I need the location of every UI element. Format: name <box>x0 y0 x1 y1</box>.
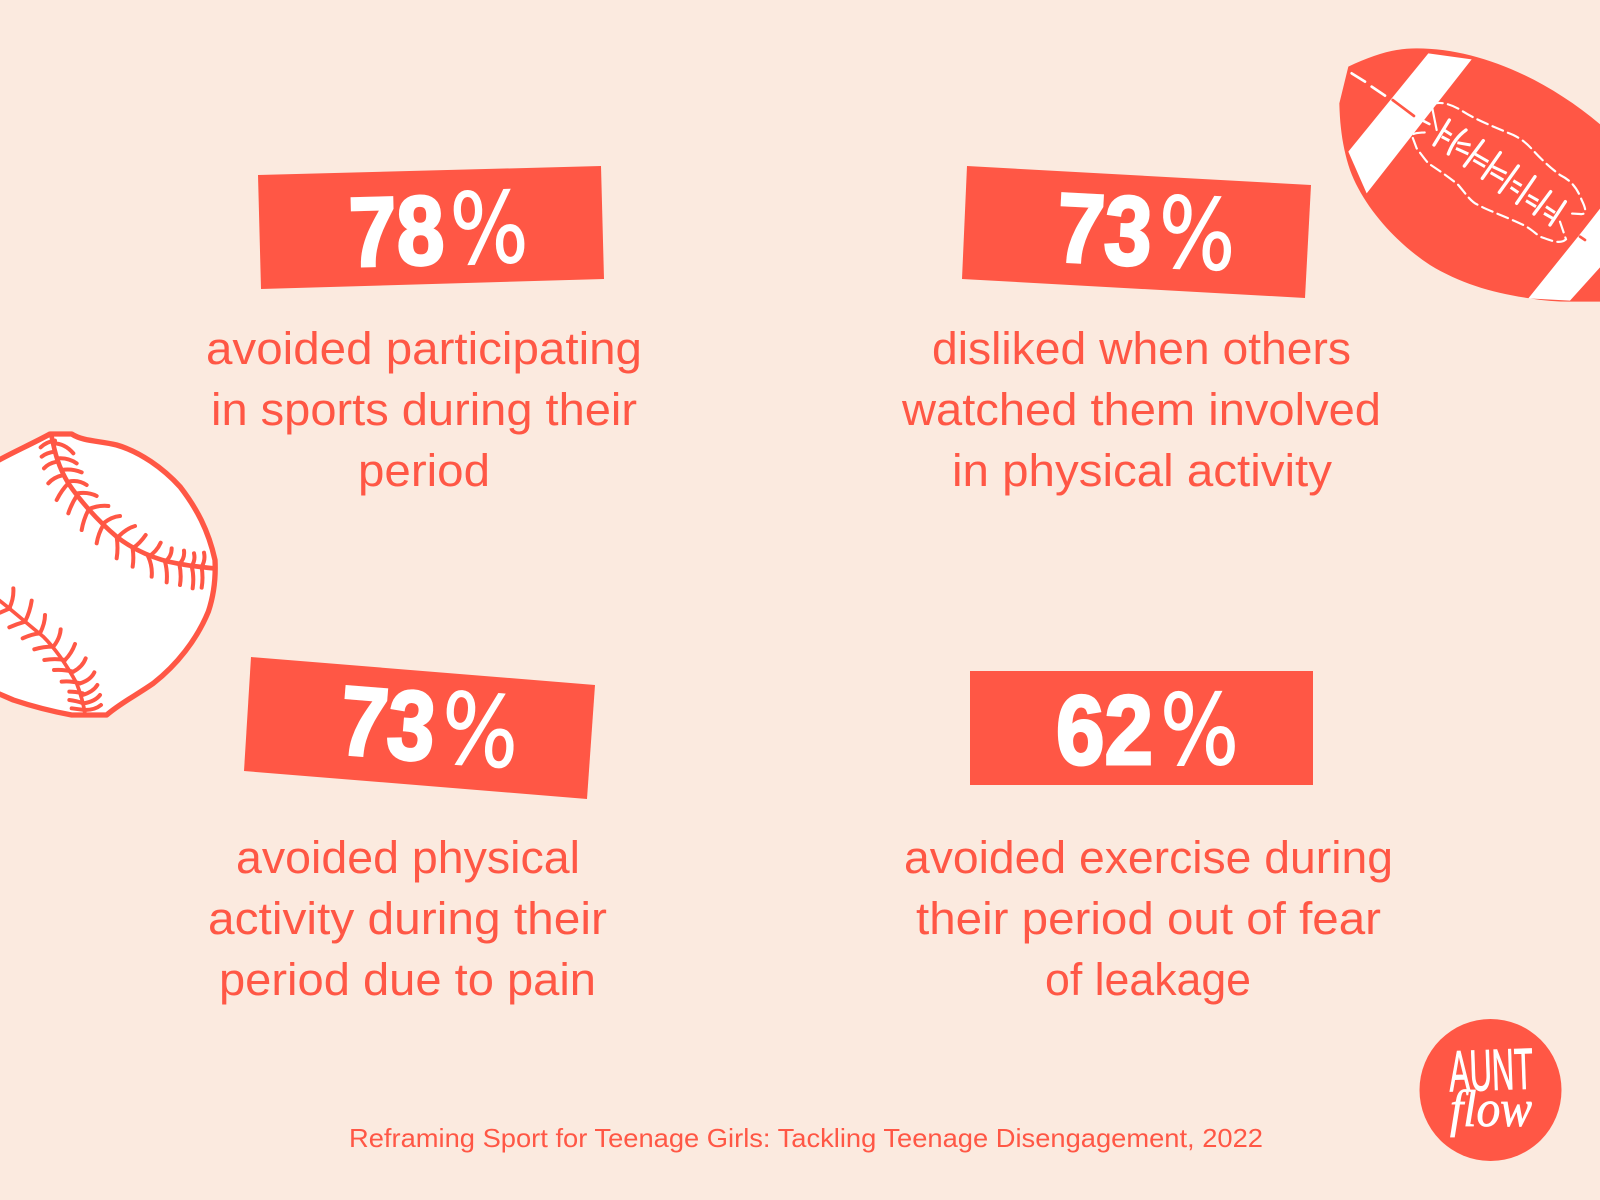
icon: baseball <box>0 434 215 715</box>
text: stat 73% bottom left description: activity during their <box>208 893 607 944</box>
stat badge: 73% bottom left: % <box>436 672 523 792</box>
icon: american football <box>1339 48 1600 302</box>
text: stat 62% description: of leakage <box>1045 954 1251 1005</box>
text: stat 73% bottom left description: period due to pain <box>219 954 596 1005</box>
logo: Aunt Flow: flow <box>1450 1081 1532 1138</box>
stat badge: 73% bottom left: 73 <box>336 665 440 782</box>
stat badge: 62%: 62 <box>1056 675 1153 785</box>
text: stat 73% top right description: disliked when others <box>932 323 1351 374</box>
text: stat 78% description: period <box>358 445 490 496</box>
stat badge: 62% <box>970 671 1313 788</box>
text: stat 62% description: their period out of fear <box>916 893 1381 944</box>
logo: Aunt Flow <box>1420 1019 1562 1161</box>
stat badge: 78%: 78 <box>348 175 446 287</box>
stat badge: 78% <box>258 166 604 290</box>
text: stat 73% bottom left description: avoided physical <box>236 832 580 883</box>
text: stat 73% top right description: watched them involved <box>901 384 1381 435</box>
text: stat 62% description: avoided exercise during <box>904 832 1393 883</box>
text: stat 78% description <box>206 323 642 496</box>
text: stat 78% description: avoided participating <box>206 323 642 374</box>
stat badge: 73% bottom left <box>244 657 595 799</box>
text: stat 78% description: in sports during their <box>211 384 637 435</box>
stat badge: 73% top right <box>962 166 1311 298</box>
text: stat 62% description <box>904 832 1393 1005</box>
stat badge: 62%: % <box>1160 674 1239 788</box>
text: stat 73% top right description <box>901 323 1381 496</box>
stat badge: 78%: % <box>449 172 530 288</box>
source citation: Reframing Sport for Teenage Girls: Tackling Teenage Disengagement, 2022 <box>349 1123 1263 1153</box>
stat badge: 73% top right: 73 <box>1054 172 1155 287</box>
stat badge: 73% top right: % <box>1155 176 1239 294</box>
text: stat 73% top right description: in physical activity <box>952 445 1333 496</box>
text: stat 73% bottom left description <box>208 832 607 1005</box>
